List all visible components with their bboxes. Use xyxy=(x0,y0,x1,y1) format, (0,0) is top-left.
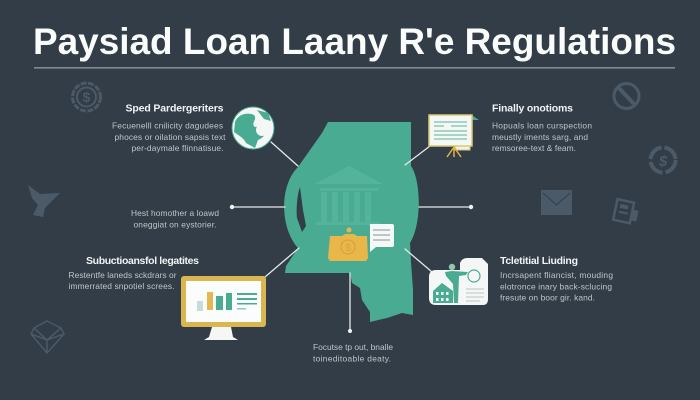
state map xyxy=(284,122,419,322)
icon: background circular dollar xyxy=(650,148,676,172)
icon: background document tool xyxy=(613,199,640,224)
body text xyxy=(500,270,613,302)
body text: Incrsapent fliancist, mouding xyxy=(500,270,613,280)
body text: fresute on boor gir. kand. xyxy=(500,292,595,302)
heading: Sped Pardergeriters xyxy=(126,102,224,114)
body text xyxy=(68,270,177,291)
title underline xyxy=(34,67,675,69)
heading: Tcletitial Liuding xyxy=(500,255,578,267)
body text: meustly iments sarg, and xyxy=(492,132,588,142)
icon: gold briefcase: $ xyxy=(345,243,351,254)
body text xyxy=(492,120,592,153)
title: Paysiad Loan Laany R'e Regulations xyxy=(33,21,676,62)
panel: top right xyxy=(492,102,592,153)
icon: background diamond xyxy=(31,321,64,353)
bank building xyxy=(315,166,383,225)
panel: middle left text xyxy=(131,208,219,230)
body text: per-daymale flinnatisue. xyxy=(132,143,224,153)
icon: globe head xyxy=(232,107,274,149)
icon: speech bubble xyxy=(370,224,394,252)
icon: person, house and document xyxy=(429,258,488,305)
body text xyxy=(112,120,226,153)
body text: remsoree-text & feam. xyxy=(492,143,576,153)
body text: Hopuals loan curspection xyxy=(492,120,592,130)
body text: immerrated snpotiel screes. xyxy=(68,281,174,291)
icon: presentation board xyxy=(429,114,479,157)
body text: Fecuenelll cnilicity dagudees xyxy=(112,120,223,130)
connector lines xyxy=(232,142,471,331)
body text: elotronce inary back-sclucing xyxy=(500,282,612,292)
panel: bottom center text: toineditoable deaty. xyxy=(313,354,391,364)
panel: top left xyxy=(112,102,226,153)
map lake xyxy=(297,187,306,232)
panel: bottom center text xyxy=(313,342,393,364)
panel: middle left text: oneggiat on eystorier. xyxy=(134,220,216,230)
icon: background dollar gear: $ xyxy=(83,89,91,105)
connector end dots xyxy=(230,205,473,333)
icon: background circular dollar: $ xyxy=(658,153,668,170)
panel: bottom left xyxy=(68,255,199,291)
panel: bottom right xyxy=(500,255,613,302)
panel: middle left text: Hest homother a loawd xyxy=(131,208,219,218)
icon: gold briefcase xyxy=(328,228,368,261)
heading: Finally onotioms xyxy=(492,102,573,114)
icon: monitor chart xyxy=(181,276,266,340)
icon: background paper plane xyxy=(28,185,60,217)
panel: bottom center text: Focutse tp out, bnalle xyxy=(313,342,393,352)
body text: phoces or oilation sapsis text xyxy=(114,132,226,142)
heading: Subuctioansfol legatites xyxy=(86,255,199,267)
icon: background no symbol xyxy=(614,84,639,108)
icon: background envelope xyxy=(541,190,572,215)
icon: background dollar gear xyxy=(72,83,100,111)
body text: Restentfe laneds sckdrars or xyxy=(68,270,177,280)
